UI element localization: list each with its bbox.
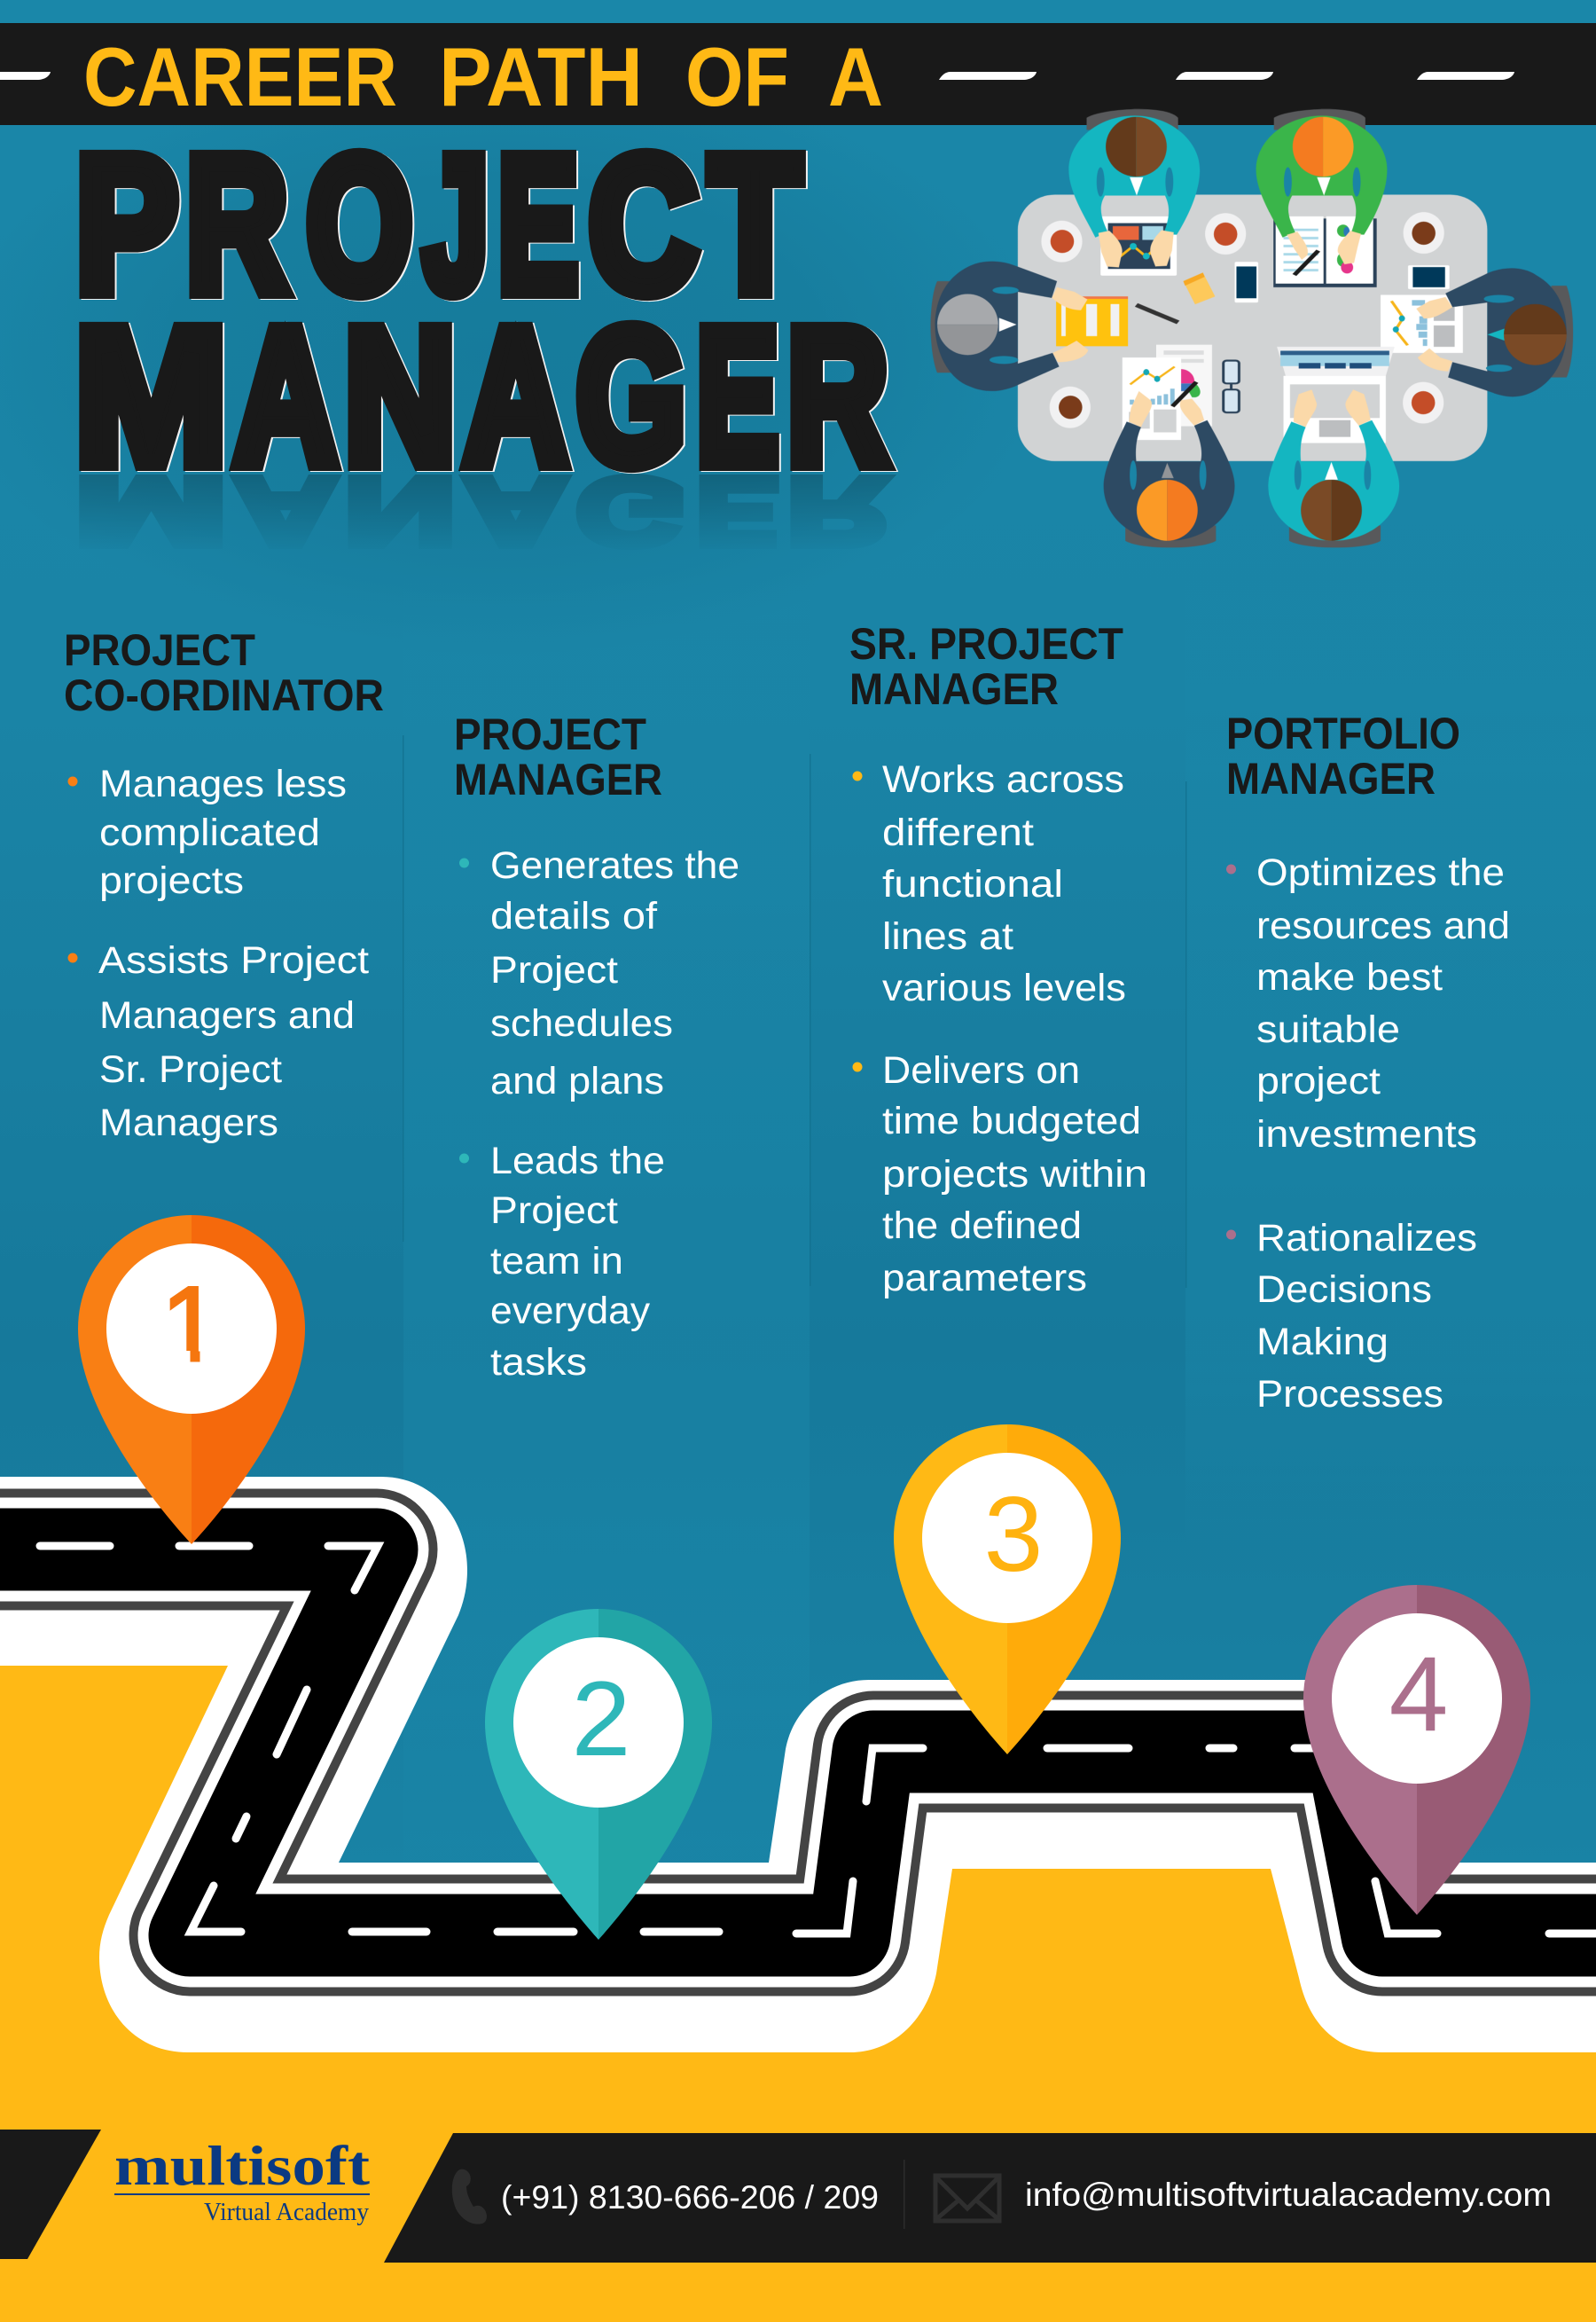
title: project manager: E — [696, 288, 778, 504]
text: tasks — [490, 1341, 587, 1384]
glasses — [1224, 361, 1239, 412]
column 1: project co-ordinator — [64, 625, 384, 1144]
text — [490, 844, 739, 1384]
pin 1 — [78, 1215, 305, 1544]
text: lines at — [882, 915, 1013, 958]
pin 4: 4 — [1389, 1635, 1448, 1753]
heading — [849, 619, 1123, 714]
text: projects — [99, 859, 244, 902]
pin 2: 2 — [572, 1659, 630, 1778]
table top — [1018, 195, 1487, 461]
person 2: green top right — [1256, 115, 1387, 264]
pin 4 — [1303, 1585, 1530, 1915]
text: Rationalizes — [1256, 1217, 1477, 1259]
text: suitable — [1256, 1008, 1400, 1051]
title reflection: M — [75, 459, 227, 566]
title: project manager: R — [787, 289, 888, 504]
text: Assists Project — [98, 939, 369, 982]
road white verge — [0, 1477, 1596, 2052]
text: team in — [490, 1240, 623, 1283]
title: project manager: M — [75, 289, 227, 504]
column 2: project manager — [454, 710, 739, 1384]
heading — [1226, 709, 1460, 804]
text: Processes — [1256, 1373, 1443, 1416]
open report — [1273, 216, 1377, 287]
text: Making — [1256, 1321, 1389, 1363]
papers with charts — [1123, 345, 1212, 440]
text: projects within — [882, 1153, 1147, 1196]
winding road — [0, 1477, 1596, 2052]
title reflection — [79, 474, 896, 535]
text: parameters — [882, 1257, 1087, 1299]
bullets — [1226, 864, 1236, 1240]
text — [882, 758, 1147, 1299]
text: Works across — [882, 758, 1124, 801]
title: career path of a: PATH — [439, 30, 643, 123]
logo: multisoft virtual academy — [114, 2135, 370, 2226]
heading: PORTFOLIO — [1226, 709, 1460, 758]
text — [1256, 851, 1510, 1416]
title: project manager: N — [344, 288, 456, 504]
footer left slanted block — [0, 2130, 101, 2259]
email: info@multisoftvirtualacademy.com — [1025, 2177, 1552, 2213]
heading: PROJECT — [454, 710, 646, 759]
heading: MANAGER — [1226, 754, 1436, 804]
text: Generates the — [490, 844, 739, 887]
text: schedules — [490, 1002, 673, 1045]
title reflection: N — [344, 459, 456, 566]
logo: multisoft virtual academy: multisoft — [114, 2135, 370, 2197]
pin 3: 3 — [984, 1475, 1043, 1594]
text: Optimizes the — [1256, 851, 1505, 894]
heading — [454, 710, 662, 804]
text: Delivers on — [882, 1049, 1080, 1092]
title: project manager: P — [76, 117, 178, 332]
heading: CO-ORDINATOR — [64, 671, 384, 720]
column 3: sr. project manager — [849, 619, 1147, 1299]
heading: PROJECT — [64, 625, 255, 675]
title: project manager: C — [589, 118, 698, 332]
chairs — [931, 109, 1573, 547]
text: Sr. Project — [99, 1048, 282, 1091]
yellow folder — [1056, 296, 1128, 346]
text: Leads the — [490, 1140, 665, 1182]
header bar — [0, 23, 1596, 125]
cups — [1041, 212, 1444, 428]
icon: envelope — [935, 2176, 999, 2221]
person 5: navy bottom left, orange hair — [1104, 382, 1235, 541]
text: the defined — [882, 1204, 1082, 1247]
text: different — [882, 812, 1034, 854]
text: and plans — [490, 1060, 664, 1102]
bullets — [459, 859, 469, 1164]
text: resources and — [1256, 905, 1510, 947]
bullets — [67, 777, 78, 963]
title: project manager: R — [186, 118, 288, 332]
column 4: portfolio manager — [1226, 709, 1510, 1416]
road surface — [0, 1549, 1596, 1935]
pin 3 — [894, 1424, 1121, 1754]
title: career path of a: A — [828, 30, 883, 123]
person 6: teal bottom right, brown hair — [1268, 389, 1399, 541]
title: career path of a — [83, 30, 883, 123]
text: Decisions — [1256, 1268, 1432, 1311]
pin 1: 1 — [161, 1265, 220, 1384]
heading: MANAGER — [454, 755, 662, 804]
icon: phone — [452, 2169, 487, 2224]
text: various levels — [882, 967, 1126, 1009]
heading: MANAGER — [849, 664, 1059, 714]
title: project manager: A — [234, 289, 337, 504]
bullets — [853, 772, 862, 1071]
pin 2 — [485, 1609, 712, 1940]
footer — [0, 2130, 1596, 2263]
text: details of — [490, 895, 658, 937]
title: project manager: T — [709, 117, 801, 332]
title reflection: E — [696, 458, 778, 565]
text — [98, 763, 369, 1144]
phone, tablet, note and pen — [1136, 262, 1450, 322]
text: complicated — [99, 812, 320, 854]
title: project manager: G — [576, 289, 686, 504]
title reflection: A — [464, 458, 567, 565]
logo: multisoft virtual academy: Virtual Academy — [204, 2198, 369, 2226]
text: Manages less — [99, 763, 347, 805]
title reflection: A — [234, 458, 337, 565]
tablet with chart — [1100, 216, 1177, 276]
road dashes on header bar — [0, 72, 1514, 80]
title reflection: G — [576, 459, 686, 566]
text: investments — [1256, 1113, 1477, 1156]
text: time budgeted — [882, 1100, 1141, 1142]
text: everyday — [490, 1290, 651, 1332]
title: project manager — [75, 116, 888, 504]
text: Project — [490, 949, 618, 992]
person 1: teal top left — [1068, 115, 1200, 267]
title reflection: R — [787, 459, 888, 566]
title: project manager: J — [423, 117, 489, 332]
person 4: navy right, brown hair — [1416, 268, 1567, 396]
title: career path of a: CAREER — [83, 30, 397, 123]
contact bar — [384, 2133, 1596, 2263]
person 3: navy left, gray hair — [935, 262, 1088, 391]
heading — [64, 625, 384, 720]
road centre dashes — [40, 1546, 1596, 1934]
phone number: (+91) 8130-666-206 / 209 — [501, 2179, 879, 2216]
title: career path of a: OF — [685, 30, 789, 123]
text: Managers — [99, 1102, 278, 1144]
text: Managers and — [99, 994, 355, 1037]
title: project manager: O — [307, 116, 412, 332]
heading: SR. PROJECT — [849, 619, 1123, 669]
text: project — [1256, 1060, 1381, 1102]
laptop — [1277, 347, 1395, 443]
text: make best — [1256, 956, 1443, 999]
text: functional — [882, 863, 1063, 906]
yellow ground — [0, 1659, 1596, 2322]
title: project manager: A — [464, 289, 567, 504]
chart paper — [1381, 294, 1463, 353]
title: project manager: E — [498, 117, 578, 332]
illustration: meeting table — [931, 109, 1573, 547]
text: Project — [490, 1189, 618, 1232]
